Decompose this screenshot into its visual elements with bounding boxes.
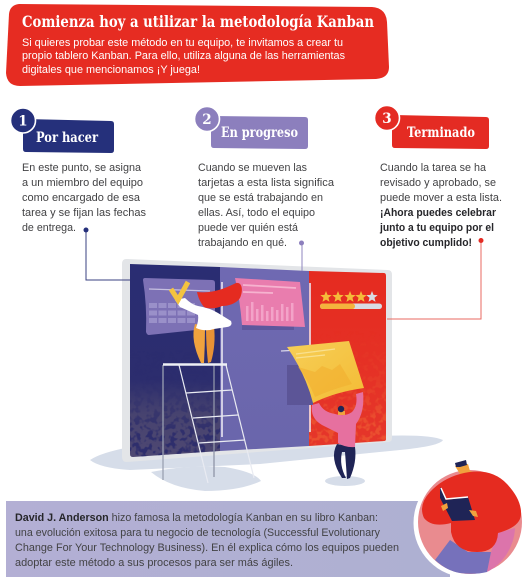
step 3: Terminado: 3 [382, 111, 392, 127]
book note text: adoptar este método a sus procesos para ser más ágiles. [15, 557, 293, 569]
step 3 text: junto a tu equipo por el [379, 222, 494, 234]
intro text: propio tablero Kanban. Para ello, utiliza alguna de las herramientas [22, 50, 345, 62]
step 2 text: ellas. Así, todo el equipo [198, 207, 315, 219]
illustration: man holding note [312, 392, 363, 479]
step 1 text: En este punto, se asigna [22, 162, 142, 174]
calendar card [143, 278, 215, 335]
rating stars [320, 291, 378, 302]
illustration: yellow note [281, 341, 364, 405]
floor shadows [90, 436, 443, 491]
book note panel [6, 501, 450, 577]
step 2: En progreso: 2 [202, 112, 212, 128]
intro text [22, 37, 345, 76]
step 2: En progreso: En progreso [221, 125, 298, 141]
step 3 text: puede mover a esta lista. [380, 192, 502, 204]
step 3 text: Cuando la tarea se ha [380, 162, 487, 174]
step 3: Terminado [374, 106, 489, 149]
illustration: man reading in circle [414, 460, 527, 582]
intro text: digitales que mencionamos ¡Y juega! [22, 64, 200, 76]
column: por hacer [130, 264, 220, 457]
step 1 text [22, 162, 146, 234]
step 1: Por hacer: 1 [18, 114, 28, 130]
step 2 text: que se está trabajando en [198, 192, 323, 204]
step 3: Terminado: Terminado [407, 125, 475, 141]
step 2 text: trabajando en qué. [198, 237, 287, 249]
book note text: una evolución exitosa para tu negocio de tecnología (Successful Evolutionary [15, 527, 380, 539]
step 2 text: Cuando se mueven las [198, 162, 307, 174]
step 2 text [198, 162, 335, 249]
step 1: Por hacer: Por hacer [36, 130, 99, 146]
step 1 text: como encargado de esa [22, 192, 141, 204]
progress bar [320, 304, 382, 309]
step 3 text: revisado y aprobado, se [380, 177, 496, 189]
connector dots [84, 228, 484, 246]
step 2: En progreso [194, 106, 308, 149]
connector lines [86, 230, 481, 319]
intro text: Si quieres probar este método en tu equipo, te invitamos a crear tu [22, 37, 343, 49]
book note text: Change For Your Technology Business). En él explica cómo los equipos pueden [15, 542, 399, 554]
column divider lines [222, 282, 310, 437]
illustration: woman placing check [171, 282, 242, 363]
step 3 text: objetivo cumplido! [380, 237, 472, 249]
speckle texture: left column [130, 404, 220, 456]
step 1 text: a un miembro del equipo [22, 177, 143, 189]
illustration: ladder [163, 364, 254, 483]
column: en progreso [220, 267, 309, 451]
step 1: Por hacer [10, 108, 114, 153]
step 1 text: de entrega. [22, 222, 76, 234]
speckle texture: right column [309, 380, 386, 446]
title: Comienza hoy a utilizar la metodología Kanban [22, 12, 374, 31]
step 2 text: tarjetas a esta lista significa [198, 177, 335, 189]
step 1 text: tarea y se fijan las fechas [22, 207, 146, 219]
column: terminado [309, 271, 386, 446]
illustration: kanban board [122, 259, 392, 462]
step 3 text: ¡Ahora puedes celebrar [380, 207, 497, 219]
step 3 text [379, 162, 502, 249]
step 2 text: puede ver quién está [198, 222, 299, 234]
book note text [15, 512, 399, 569]
book note text: David J. Anderson hizo famosa la metodología Kanban en su libro Kanban: [15, 512, 378, 524]
header banner [6, 4, 389, 86]
pink chart card [235, 278, 305, 330]
